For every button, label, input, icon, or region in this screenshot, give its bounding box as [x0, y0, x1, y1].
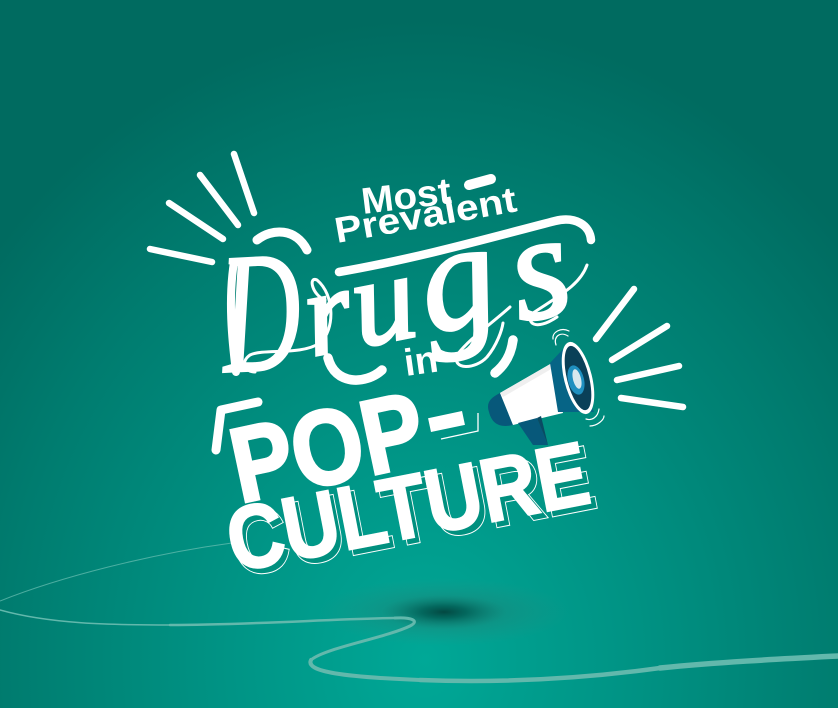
- heading: CULTURE outline shadow: CULTURE: [223, 428, 603, 597]
- rays: right burst: [596, 289, 683, 407]
- heading: Drugs: [214, 174, 583, 410]
- heading: in: in: [401, 339, 441, 385]
- heading: POP-: -: [410, 347, 479, 477]
- heading: Drugs: D: [214, 216, 305, 410]
- title lettering: [214, 170, 603, 597]
- rays: left burst: [150, 154, 254, 262]
- lower ribbon curve: [0, 610, 838, 681]
- flourishes: [216, 179, 591, 450]
- outline inner cut: CULTURE: [223, 428, 603, 597]
- floor shadow: [319, 578, 569, 646]
- icon: megaphone: [488, 330, 604, 445]
- hyphen outline shadow: [441, 413, 478, 439]
- heading: Drugs: s: [494, 180, 583, 354]
- heading: Prevalent: Prevalent: [331, 179, 520, 251]
- heading: Most: Most: [359, 170, 453, 222]
- heading: POP-: POP: [220, 370, 435, 525]
- heading: CULTURE: CULTURE: [219, 424, 597, 592]
- thin upper curve: [0, 543, 232, 601]
- heading: Drugs: rug: [292, 188, 509, 382]
